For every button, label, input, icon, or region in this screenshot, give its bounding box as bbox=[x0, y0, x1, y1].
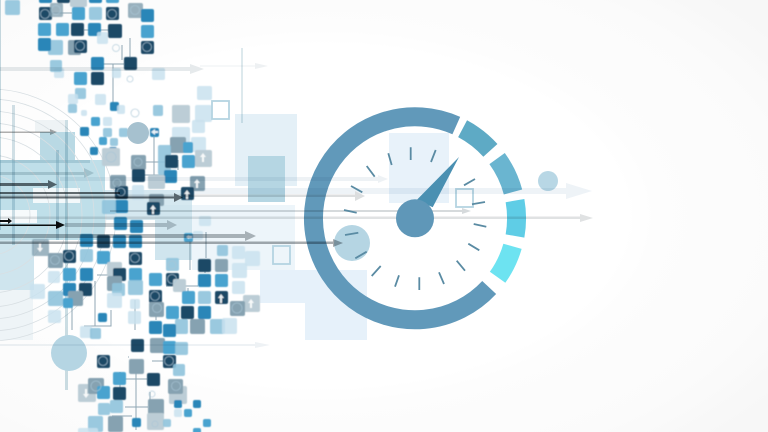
gauge tick marks bbox=[344, 147, 486, 290]
pale background panels bbox=[0, 114, 449, 340]
gauge segment 1 bbox=[463, 129, 490, 150]
faint guide bars bbox=[0, 0, 243, 390]
circle: large pale blue node bbox=[51, 335, 87, 371]
outline squares bbox=[212, 101, 473, 264]
small arrow glyphs bbox=[37, 129, 254, 398]
gauge hub bbox=[396, 199, 434, 237]
black arrows bbox=[0, 221, 65, 229]
upper squares bbox=[5, 0, 212, 215]
gauge segment 2 bbox=[497, 159, 513, 192]
gauge ring bbox=[313, 117, 489, 320]
pale wide arrows bbox=[0, 63, 592, 348]
gauge ring and segments bbox=[313, 117, 517, 320]
gauge segment 4 bbox=[498, 246, 512, 277]
rings inside squares bbox=[40, 6, 242, 427]
circuit connector lines bbox=[52, 13, 206, 430]
lower squares bbox=[30, 216, 260, 432]
circle: grey node bbox=[127, 122, 149, 144]
arrows bbox=[0, 63, 593, 348]
gauge segment 3 bbox=[515, 201, 517, 236]
gauge needle bbox=[417, 157, 459, 207]
circle: node on gauge left bbox=[334, 225, 370, 261]
grey arrows bbox=[0, 129, 57, 135]
circle: pale node beside gauge bbox=[538, 171, 558, 191]
concentric arcs bbox=[0, 89, 116, 341]
gauge dial bbox=[344, 147, 486, 290]
dark arrows bbox=[0, 180, 57, 189]
left cluster of squares and rings bbox=[5, 0, 260, 432]
